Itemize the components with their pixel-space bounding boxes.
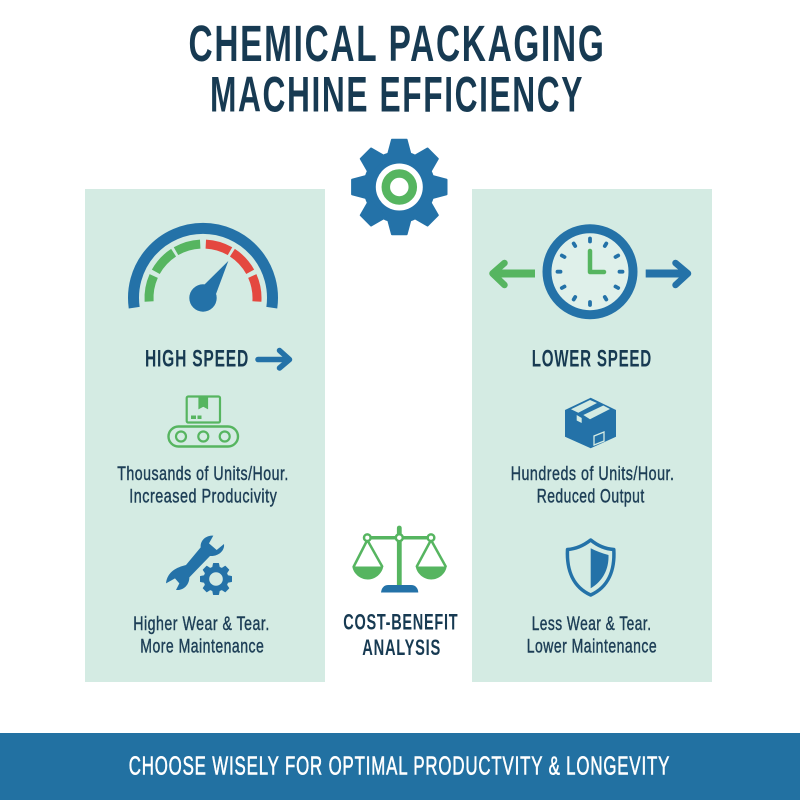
text: lower speed maintenance [527,613,657,658]
text: high speed maintenance: Higher Wear & Tear. [133,613,270,635]
text: cost-benefit analysis: ANALYSIS [362,635,441,660]
text: high speed output: Thousands of Units/Hour. [117,463,289,485]
title: MACHINE EFFICIENCY [210,66,584,122]
title [188,15,606,122]
text: lower speed maintenance: Lower Maintenance [527,636,657,658]
heading: lower speed: LOWER SPEED [532,347,652,373]
icon: clock with arrows [492,229,688,315]
icon: balance scales [352,528,447,592]
text: high speed maintenance: More Maintenance [140,636,264,658]
icon: wrench and gear [166,536,232,594]
icon: shield [567,540,614,595]
text: cost-benefit analysis [343,609,458,660]
heading: high speed: HIGH SPEED [145,347,249,373]
text: lower speed output: Reduced Output [537,486,645,508]
icon: central gear [352,140,446,234]
panel: lower speed [472,189,712,682]
icon: blue box [565,398,616,448]
icon: conveyor with package [168,396,238,446]
panel: high speed [85,189,325,682]
text: high speed output: Increased Producivity [129,486,277,508]
text: cost-benefit analysis: COST-BENEFIT [343,609,458,634]
text: high speed output [117,463,289,508]
icon: right arrow [258,350,290,368]
footer banner [0,733,800,800]
icon: speedometer gauge [134,228,272,312]
text: lower speed maintenance: Less Wear & Tear. [532,613,652,635]
text: lower speed output [511,463,674,508]
text: lower speed output: Hundreds of Units/Hour. [511,463,674,485]
text: high speed maintenance [133,613,270,658]
